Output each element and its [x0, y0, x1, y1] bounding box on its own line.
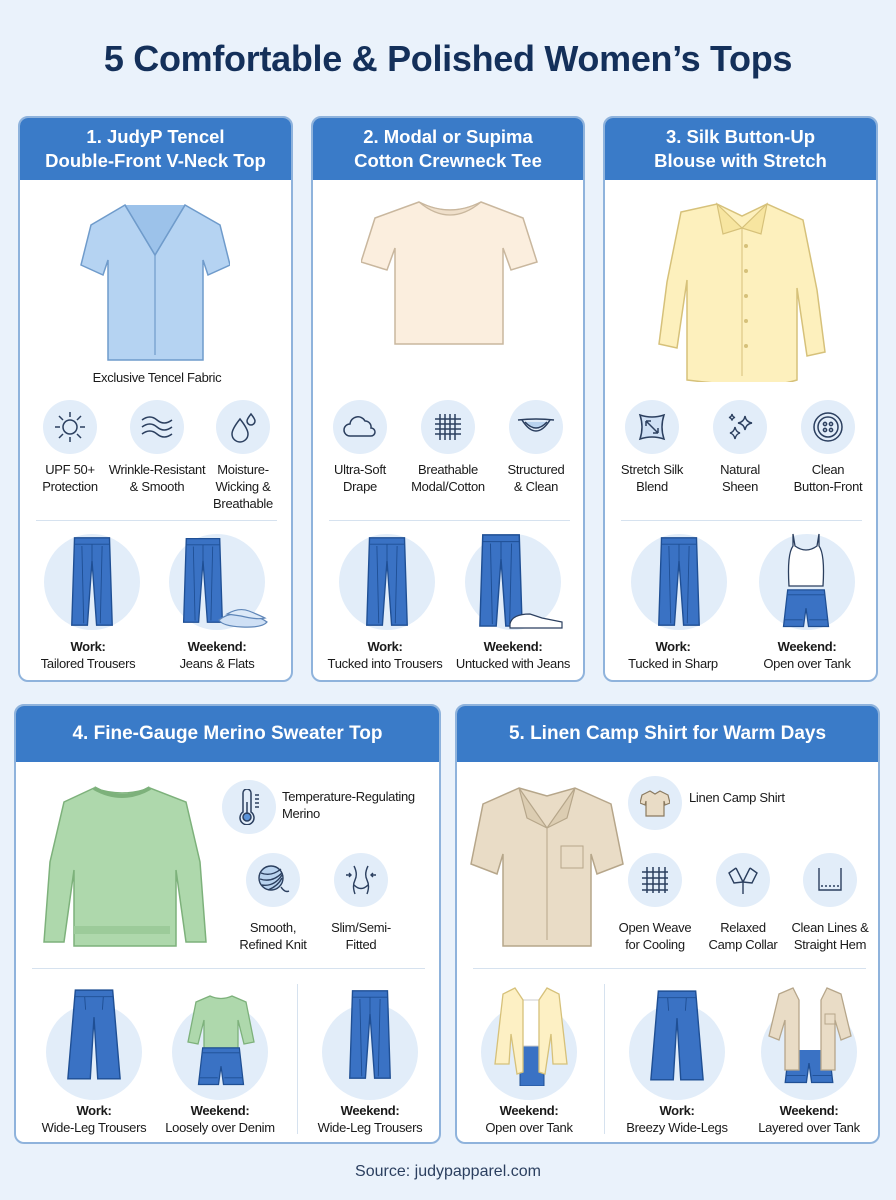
panel: 4 Merino sweater	[14, 704, 441, 1144]
outfit: work wide legs: Breezy Wide-Legs	[626, 1120, 728, 1135]
heading	[20, 118, 291, 180]
heading: 2. Modal or Supima	[363, 126, 533, 147]
text: temperature: Merino	[282, 806, 320, 821]
icon: yarn	[246, 853, 300, 907]
panel: 5 Linen camp shirt	[455, 704, 880, 1144]
label: stretch silk: Blend	[636, 479, 668, 494]
label: ultra soft: Drape	[343, 479, 377, 494]
outfit: work	[41, 534, 140, 671]
label: breathable: Breathable	[418, 462, 478, 477]
label: camp collar: Relaxed	[720, 920, 766, 935]
outfit: work: Wide-Leg Trousers	[42, 1120, 146, 1135]
outfit: weekend trousers: Weekend:	[341, 1103, 399, 1118]
icon: waist fit	[334, 853, 388, 907]
label: button front: Button-Front	[794, 479, 862, 494]
label: straight hem: Clean Lines &	[791, 920, 869, 935]
label: smooth knit: Refined Knit	[239, 937, 307, 952]
outfit: weekend denim: Weekend:	[191, 1103, 249, 1118]
heading: 3. Silk Button-Up	[666, 126, 815, 147]
garment: beige camp shirt	[470, 787, 624, 947]
icon: cloud	[333, 400, 387, 454]
label: open weave	[619, 920, 691, 952]
label: moisture: Breathable	[213, 496, 273, 511]
label: moisture: Wicking &	[215, 479, 271, 494]
garment: yellow blouse	[658, 202, 826, 382]
label: smooth knit	[239, 920, 307, 952]
label: button front	[794, 462, 862, 494]
icon: collar	[509, 400, 563, 454]
heading: 5. Linen Camp Shirt for Warm Days	[509, 723, 826, 744]
outfit: work wide legs: Work:	[659, 1103, 695, 1118]
text: linen camp shirt: Linen Camp Shirt	[689, 790, 785, 805]
outfit: weekend open over tank	[481, 987, 577, 1135]
heading: Cotton Crewneck Tee	[354, 150, 542, 171]
title: 5 Comfortable & Polished Women’s Tops	[104, 38, 792, 79]
outfit: work	[42, 989, 146, 1135]
label: breathable: Modal/Cotton	[411, 479, 485, 494]
label: UPF: UPF 50+	[45, 462, 95, 477]
panel: 3 Silk button-up	[603, 116, 878, 682]
outfit: weekend	[169, 534, 268, 671]
heading	[457, 706, 878, 762]
outfit: work wide legs	[626, 990, 728, 1135]
panel: 2 Modal crewneck tee	[311, 116, 585, 682]
outfit: weekend layered: Layered over Tank	[758, 1120, 860, 1135]
label: stretch silk	[621, 462, 684, 494]
label: slim fit: Slim/Semi-	[331, 920, 391, 935]
icon: open weave	[628, 853, 682, 907]
outfit: work: Tucked in Sharp	[628, 656, 718, 671]
outfit: weekend: Untucked with Jeans	[456, 656, 570, 671]
label: open weave: for Cooling	[625, 937, 685, 952]
source: Source: judypapparel.com	[355, 1163, 541, 1180]
label: camp collar	[709, 920, 778, 952]
label: structured	[508, 462, 564, 494]
heading: 4. Fine-Gauge Merino Sweater Top	[72, 723, 383, 744]
label: stretch silk: Stretch Silk	[621, 462, 683, 477]
caption: Exclusive Tencel Fabric	[93, 370, 221, 385]
outfit: work: Work:	[367, 639, 403, 654]
label: camp collar: Camp Collar	[709, 937, 777, 952]
icon: waves	[130, 400, 184, 454]
outfit: weekend trousers: Wide-Leg Trousers	[318, 1120, 422, 1135]
outfit: weekend open over tank: Weekend:	[500, 1103, 558, 1118]
label: slim fit	[331, 920, 391, 952]
label: UPF	[42, 462, 98, 494]
heading: 1. JudyP Tencel	[86, 126, 225, 147]
label: straight hem: Straight Hem	[794, 937, 866, 952]
heading: Double-Front V-Neck Top	[45, 150, 266, 171]
label: slim fit: Fitted	[346, 937, 376, 952]
outfit: weekend denim: Loosely over Denim	[165, 1120, 275, 1135]
icon: button	[801, 400, 855, 454]
icon: weave	[421, 400, 475, 454]
outfit: weekend layered: Weekend:	[780, 1103, 838, 1118]
label: wrinkle: Wrinkle-Resistant	[109, 462, 205, 477]
outfit: work: Work:	[76, 1103, 112, 1118]
outfit: weekend	[759, 534, 855, 671]
label: ultra soft	[334, 462, 386, 494]
label: moisture: Moisture-	[217, 462, 269, 477]
outfit: weekend	[456, 534, 570, 671]
outfit: weekend denim	[165, 995, 275, 1135]
outfit: work: Work:	[655, 639, 691, 654]
outfit: work: Work:	[70, 639, 106, 654]
outfit: weekend: Weekend:	[484, 639, 542, 654]
label: ultra soft: Ultra-Soft	[334, 462, 386, 477]
outfit: weekend: Weekend:	[188, 639, 246, 654]
label: UPF: Protection	[42, 479, 98, 494]
outfit: work: Tucked into Trousers	[328, 656, 442, 671]
outfit: weekend open over tank: Open over Tank	[485, 1120, 573, 1135]
outfit: work	[628, 534, 727, 671]
text: temperature: Temperature-Regulating	[282, 789, 415, 804]
label: button front: Clean	[812, 462, 844, 477]
panel: 1 JudyP Tencel top	[18, 116, 293, 682]
icon: straight hem	[803, 853, 857, 907]
label: moisture	[213, 462, 273, 511]
text: temperature	[282, 789, 415, 821]
icon: sparkles	[713, 400, 767, 454]
garment: cream tee	[361, 201, 538, 345]
outfit: weekend trousers	[318, 990, 422, 1135]
garment: green sweater	[43, 786, 207, 947]
label: structured: & Clean	[514, 479, 558, 494]
outfit: weekend: Open over Tank	[763, 656, 851, 671]
garment: blue v-neck top	[80, 204, 230, 361]
outfit: weekend layered	[758, 987, 860, 1135]
icon: camp collar	[716, 853, 770, 907]
heading	[16, 706, 439, 762]
label: smooth knit: Smooth,	[250, 920, 296, 935]
heading	[313, 118, 583, 180]
label: sheen: Natural	[720, 462, 760, 477]
label: structured: Structured	[508, 462, 564, 477]
outfit: work: Tailored Trousers	[41, 656, 135, 671]
label: open weave: Open Weave	[619, 920, 691, 935]
label: straight hem	[791, 920, 869, 952]
heading: Blouse with Stretch	[654, 150, 827, 171]
label: sheen	[720, 462, 760, 494]
label: sheen: Sheen	[722, 479, 758, 494]
icon: drops	[216, 400, 270, 454]
label: wrinkle: & Smooth	[130, 479, 184, 494]
label: wrinkle	[108, 462, 206, 494]
icon: small shirt	[628, 776, 682, 830]
outfit: weekend: Weekend:	[778, 639, 836, 654]
icon: thermometer	[222, 780, 276, 834]
heading	[605, 118, 876, 180]
outfit: weekend: Jeans & Flats	[180, 656, 254, 671]
outfit: work	[328, 534, 442, 671]
label: breathable	[411, 462, 485, 494]
icon: stretch	[625, 400, 679, 454]
icon: sun	[43, 400, 97, 454]
